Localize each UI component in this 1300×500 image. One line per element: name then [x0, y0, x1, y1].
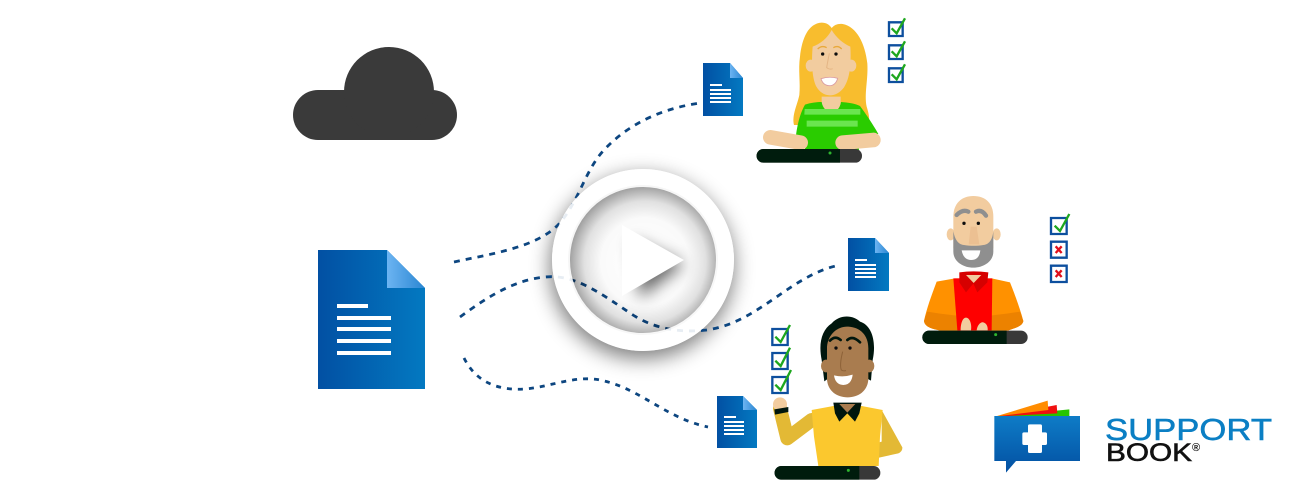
registered mark: ®: [1192, 442, 1200, 454]
figure: bald man with grey beard: [922, 196, 1028, 344]
laptop: [756, 149, 862, 163]
hands: [961, 318, 988, 330]
bald head: [953, 196, 993, 248]
eyes, brows and nose: [957, 211, 986, 244]
yellow shirt: [812, 406, 883, 466]
icon: cloud: [293, 47, 457, 140]
play button white backing disc: [552, 169, 734, 351]
icon: document top: [703, 63, 743, 116]
raised hand: [773, 397, 787, 411]
triangle shadow: [632, 240, 684, 298]
grey beard: [953, 231, 993, 268]
jacket sleeves shading: [924, 312, 1023, 330]
laptop: [922, 331, 1028, 344]
laptop: [774, 466, 880, 480]
icon: document middle: [848, 238, 889, 291]
logo wordmark: BOOK: BOOK: [1106, 439, 1192, 467]
collar: [959, 271, 988, 292]
right arm: [867, 410, 902, 460]
logo icon: [994, 401, 1080, 473]
neck: [839, 404, 855, 413]
lower wristband: [865, 445, 872, 460]
white ring: [561, 178, 725, 342]
face: [812, 30, 851, 95]
dashed connector: document to top recipient: [454, 103, 700, 262]
neck: [822, 97, 841, 112]
neck: [966, 275, 981, 283]
icon: document bottom: [717, 396, 757, 448]
icon: large document: [318, 250, 425, 389]
logo wordmark: SUPPORT: SUPPORT: [1105, 413, 1272, 447]
red shirt: [953, 278, 992, 330]
shirt stripes: [804, 109, 860, 127]
left arm: [780, 408, 812, 438]
figure: man with dark hair and yellow shirt: [773, 316, 902, 480]
checklist: dark-haired man: [772, 325, 791, 393]
face: [827, 327, 868, 397]
checklist: bald man: [1051, 214, 1069, 282]
green shirt: [796, 102, 878, 150]
arms: [770, 137, 873, 143]
ears: [806, 60, 856, 72]
hair: [820, 316, 874, 381]
inner vignette: [568, 185, 718, 335]
mouth: [962, 250, 980, 260]
eyes, brows, nose, mouth: [830, 338, 860, 385]
facial features: [818, 47, 842, 86]
hair: [793, 23, 869, 125]
ears: [947, 228, 1001, 240]
play button drop shadow: [550, 175, 734, 359]
collar: [833, 403, 862, 422]
play triangle: [622, 225, 684, 296]
dashed connector: document to bottom recipient: [464, 358, 708, 427]
ears: [821, 360, 874, 372]
play button overlay: [561, 178, 725, 342]
checklist: woman: [889, 18, 905, 82]
figure: woman with blonde hair: [756, 23, 878, 163]
logo: Support Book: [994, 401, 1272, 473]
orange jacket: [924, 278, 1023, 330]
raised wristband: [774, 407, 788, 415]
lower hand: [855, 446, 870, 461]
dashed connector: document to middle recipient: [460, 265, 840, 331]
